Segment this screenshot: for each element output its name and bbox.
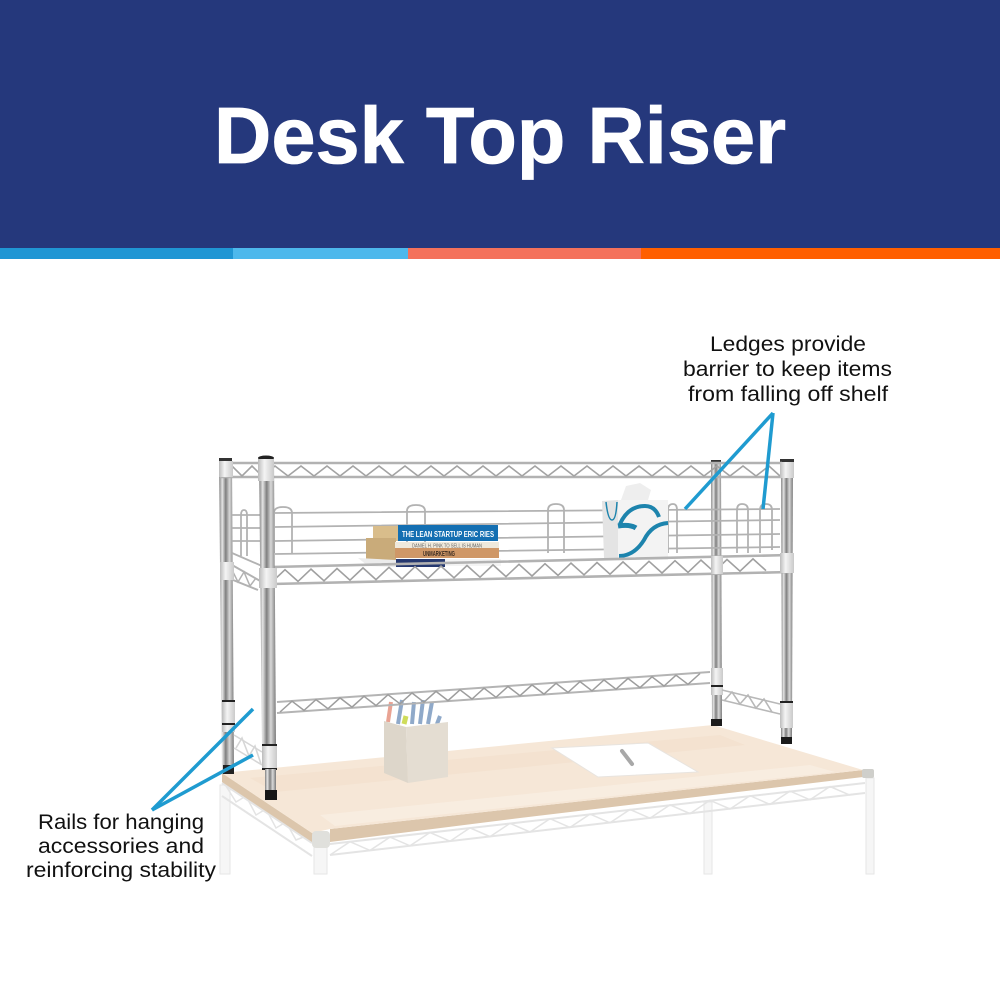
callout text: rails (26, 811, 217, 882)
front left post (259, 460, 276, 745)
callout arrows: rails (152, 709, 253, 810)
front left post collars and foot (219, 456, 794, 800)
ledge wires (232, 504, 780, 566)
wood desktop (222, 725, 874, 848)
back left post (219, 460, 234, 772)
pencil cup (384, 700, 448, 783)
callout text: ledges: from falling off shelf (688, 383, 888, 406)
lower rail (277, 672, 710, 713)
title: Desk Top Riser (214, 91, 786, 180)
callout text: ledges: Ledges provide (710, 333, 866, 356)
books: DANIEL H. PINK TO SELL IS HUMAN (412, 544, 482, 550)
books: THE LEAN STARTUP ERIC RIES (402, 530, 494, 539)
notepad and pen (552, 743, 698, 777)
tissue box (602, 483, 668, 560)
callout text: rails: Rails for hanging (38, 811, 204, 834)
header banner (0, 0, 1000, 248)
workbench white wire rails (222, 783, 865, 856)
lower shelf (228, 555, 790, 590)
callout text: ledges: barrier to keep items (683, 358, 892, 381)
callout text: ledges (683, 333, 892, 406)
books (358, 525, 501, 567)
callout text: rails: reinforcing stability (26, 859, 217, 882)
workbench legs (220, 778, 874, 874)
post caps and feet, back (219, 458, 723, 774)
product photo: desk top riser on workbench (219, 456, 874, 874)
front right post foot (780, 459, 794, 744)
colour stripe (0, 248, 1000, 259)
top shelf (220, 463, 782, 477)
books: UNMARKETING (423, 551, 455, 558)
callout text: rails: accessories and (38, 835, 204, 858)
back right post (711, 462, 722, 724)
side rails (234, 690, 780, 765)
front right post (781, 460, 793, 738)
callout arrows: ledges (685, 413, 773, 509)
